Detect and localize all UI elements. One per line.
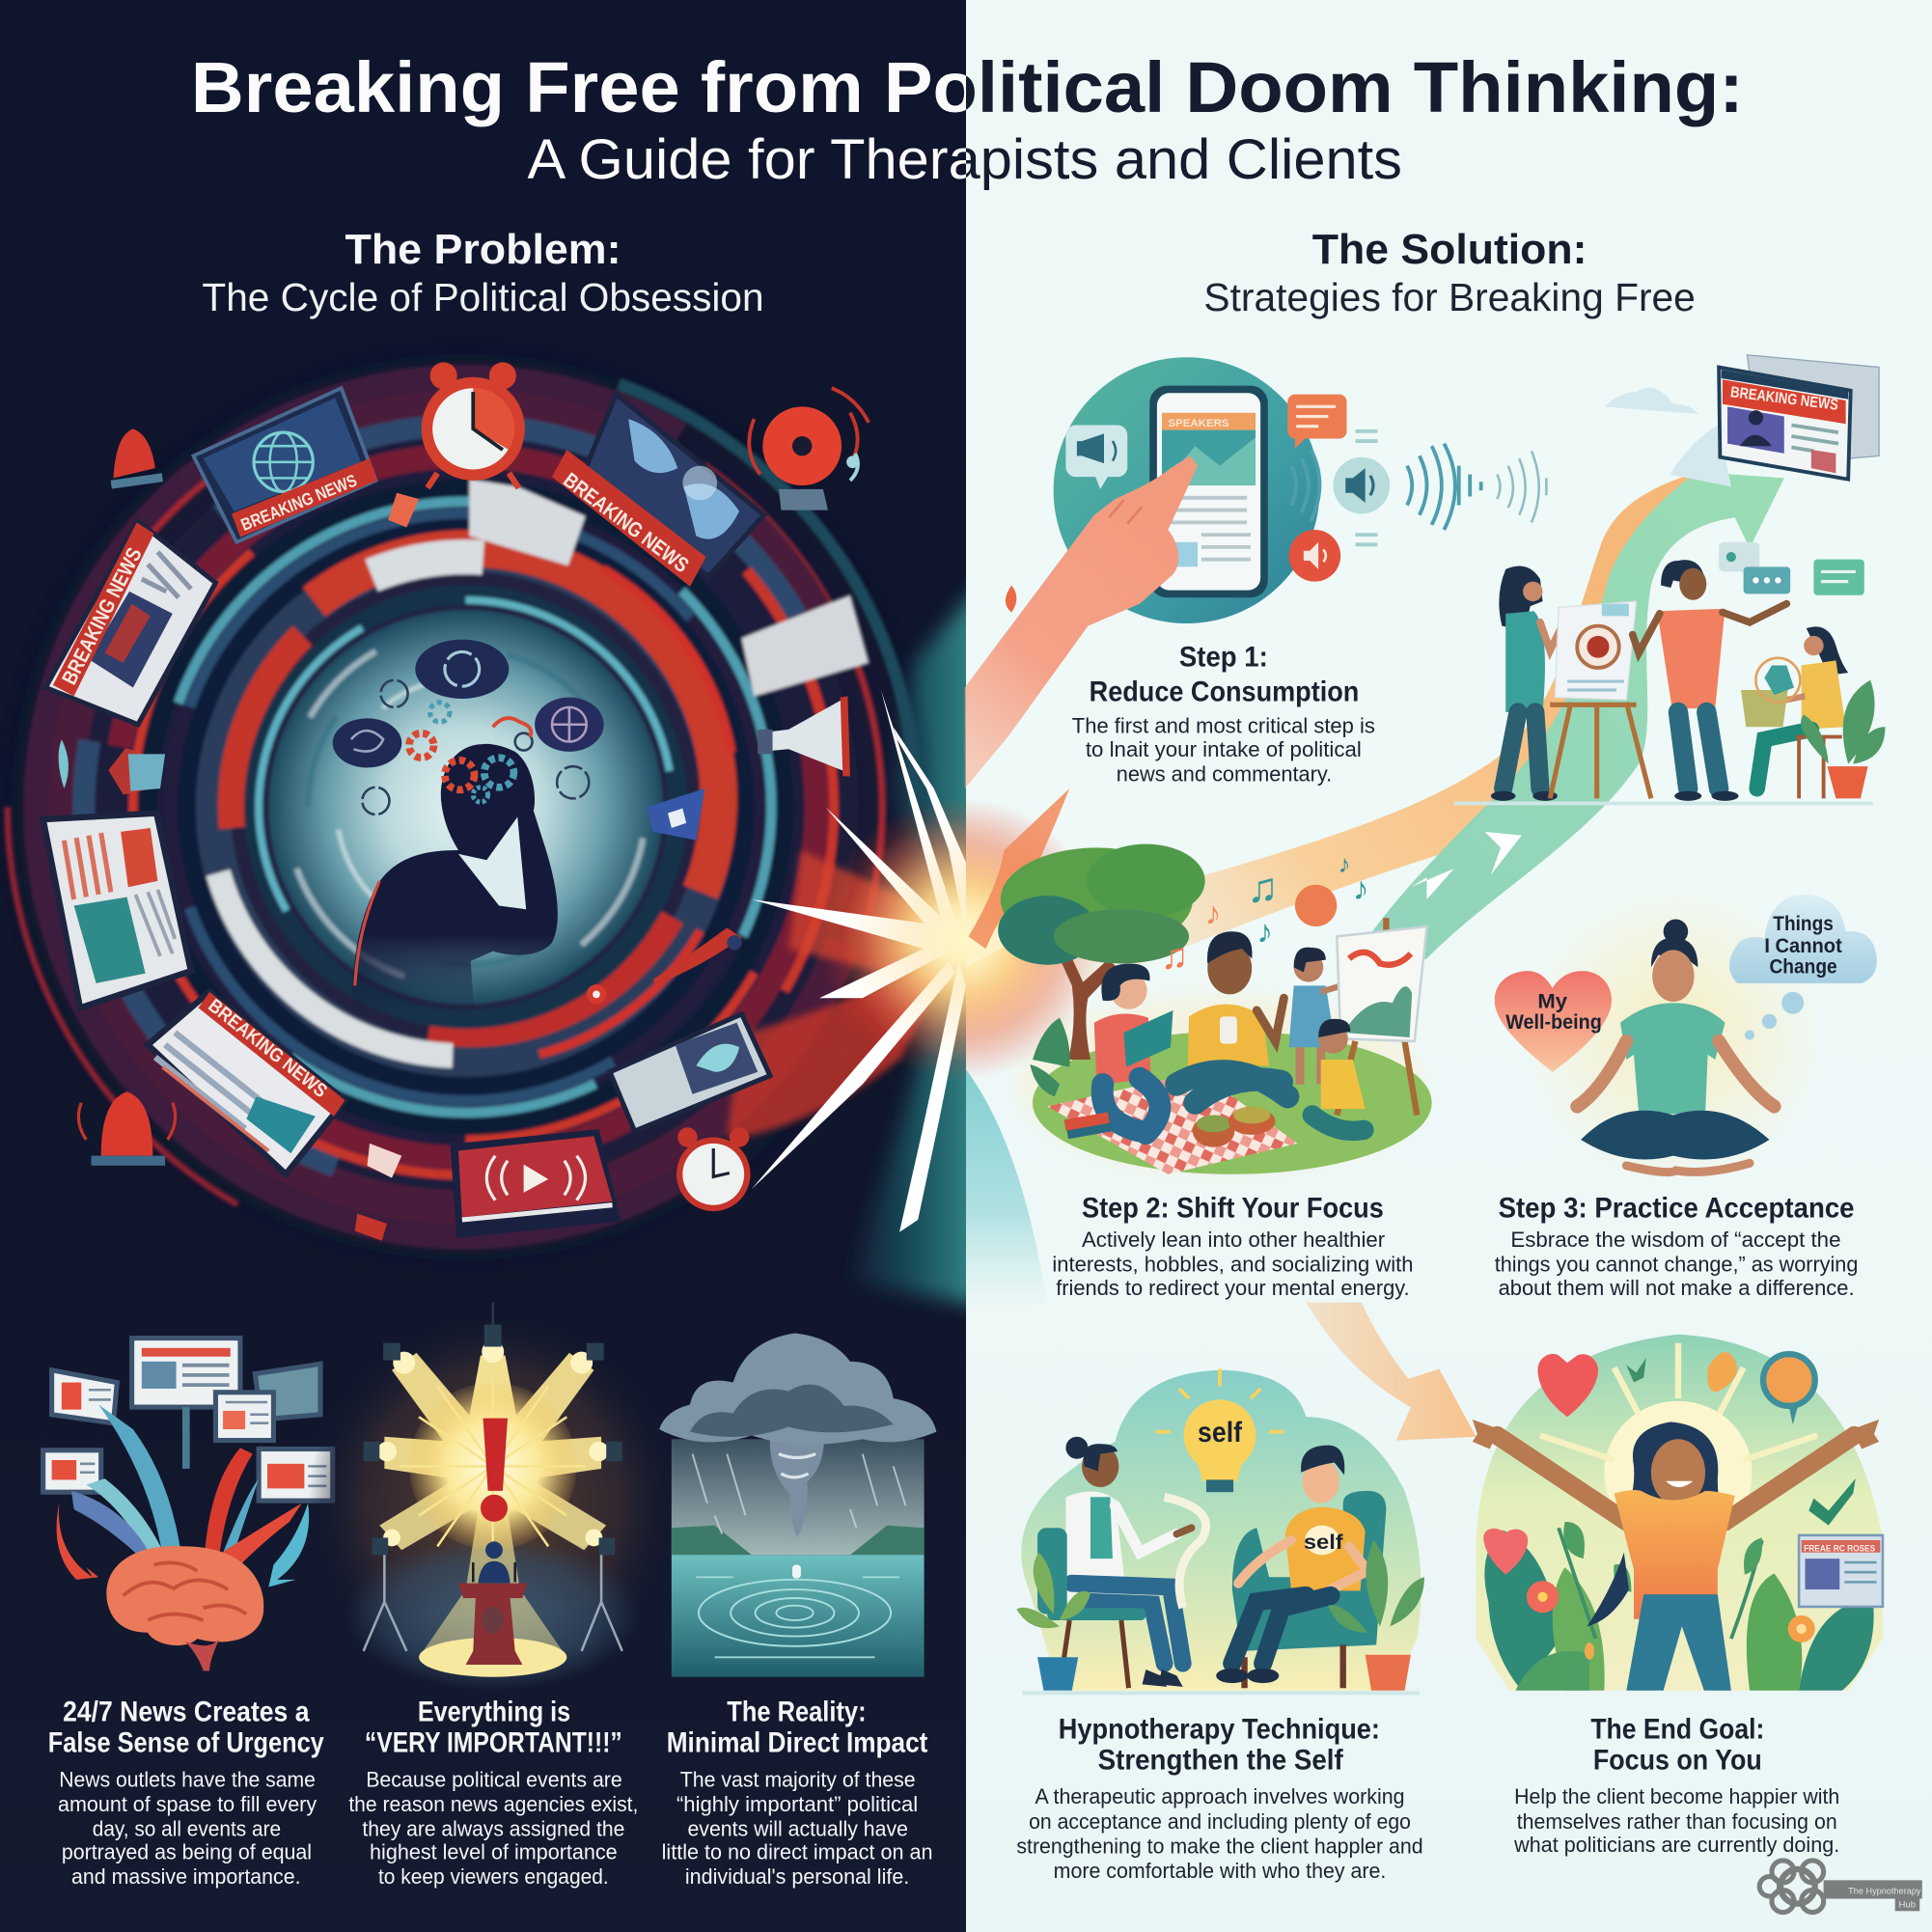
therapist chair bbox=[1037, 1528, 1067, 1615]
hypnotherapy text: Strengthen the Self bbox=[1098, 1744, 1343, 1776]
background: light right half bbox=[966, 0, 1932, 1932]
icon: world map screen breaking news bbox=[552, 395, 764, 587]
ripples bbox=[699, 1580, 891, 1646]
title: Breaking Free from Political Doom Thinking: bbox=[191, 47, 1744, 127]
light gap between arm and chest bbox=[458, 817, 526, 909]
step 3 text: Esbrace the wisdom of “accept the bbox=[1510, 1228, 1841, 1252]
illustration: step 3 meditation: I Cannot bbox=[1764, 935, 1842, 957]
icon: globe monitor breaking news: BREAKING NEWS bbox=[238, 471, 360, 535]
text: false sense of urgency: False Sense of Urgency bbox=[48, 1727, 324, 1759]
end goal text: Focus on You bbox=[1593, 1744, 1762, 1776]
illustration: end goal happy woman bbox=[1473, 1335, 1883, 1691]
image card lower right bbox=[610, 1014, 770, 1131]
illustration: step 3 meditation: Things bbox=[1773, 913, 1834, 935]
heading: the problem bbox=[202, 227, 764, 319]
music notes: ♪ bbox=[1205, 897, 1221, 932]
music notes bbox=[1161, 851, 1369, 978]
stands bbox=[364, 1555, 622, 1651]
step 2 text: Actively lean into other healthier bbox=[1082, 1228, 1386, 1252]
text: false sense of urgency: day, so all events are bbox=[93, 1816, 281, 1840]
illustration: hypnotherapy session bbox=[1016, 1369, 1424, 1693]
illustration: step 3 meditation bbox=[1495, 881, 1877, 1189]
text: very important: Because political events are bbox=[366, 1767, 622, 1791]
illustration: step 2 family picnic bbox=[998, 844, 1432, 1174]
blanket bbox=[1047, 1072, 1297, 1174]
gears in head bbox=[445, 758, 513, 802]
logo: hypnotherapy hub key: The Hypnotherapy bbox=[1848, 1886, 1921, 1896]
text: minimal direct impact: individual's personal life. bbox=[685, 1864, 909, 1889]
therapist bbox=[1065, 1437, 1088, 1459]
text: false sense of urgency: News outlets have the same bbox=[59, 1767, 316, 1791]
illustration: news overload brain bbox=[43, 1339, 333, 1670]
icon: alarm clock top bbox=[422, 362, 525, 488]
streams bbox=[98, 1405, 185, 1589]
plants bbox=[1016, 1553, 1090, 1628]
client bbox=[1303, 1459, 1339, 1504]
illustration: hypnotherapy session: self bbox=[1198, 1417, 1242, 1449]
step 2 text: friends to redirect your mental energy. bbox=[1056, 1276, 1410, 1300]
step 1 text: Step 1: bbox=[1179, 642, 1268, 674]
video player bbox=[453, 1131, 619, 1236]
text: very important: the reason news agencies exist, bbox=[348, 1792, 638, 1816]
woman standing bbox=[1499, 566, 1543, 631]
brain bbox=[106, 1546, 263, 1645]
exclamation bbox=[483, 1419, 508, 1491]
icon: megaphone bbox=[758, 696, 850, 776]
end goal text: Help the client become happier with bbox=[1514, 1784, 1839, 1808]
text: minimal direct impact: “highly important” political bbox=[676, 1792, 918, 1816]
hypnotherapy text: strengthening to make the client happler and bbox=[1016, 1834, 1423, 1858]
icon: breaking news browser window: BREAKING NEWS bbox=[1729, 384, 1839, 414]
icon: world map screen breaking news: BREAKING NEWS bbox=[559, 468, 694, 577]
speech bubbles and speaker waves bbox=[1065, 425, 1127, 489]
tree bbox=[1056, 945, 1118, 1060]
text: minimal direct impact: The Reality: bbox=[727, 1697, 867, 1728]
newspaper bottom breaking news bbox=[148, 992, 345, 1174]
end goal text: what politicians are currently doing. bbox=[1513, 1833, 1839, 1857]
heading: the problem: The Problem: bbox=[345, 227, 621, 273]
lights bbox=[482, 1340, 504, 1363]
icon: bell bottom left bbox=[78, 1091, 176, 1166]
illustration: spotlight exclamation over podium bbox=[308, 1303, 677, 1695]
step 3 text: about them will not make a difference. bbox=[1499, 1276, 1855, 1300]
music notes: ♪ bbox=[1339, 851, 1350, 878]
red wash behind right edge of vortex bbox=[727, 850, 955, 1140]
plant bbox=[1801, 680, 1885, 764]
hair bbox=[1616, 1421, 1730, 1531]
heading: the solution: The Solution: bbox=[1312, 227, 1587, 273]
heading: the solution bbox=[1203, 227, 1696, 319]
text: false sense of urgency: amount of spase to fill every bbox=[58, 1792, 317, 1816]
title: A Guide for Therapists and Clients bbox=[527, 128, 1402, 191]
step 2 text bbox=[1052, 1192, 1413, 1300]
music notes: ♪ bbox=[1256, 915, 1273, 951]
step 1 text: to lnait your intake of political bbox=[1086, 737, 1362, 761]
step 3 text: Step 3: Practice Acceptance bbox=[1499, 1192, 1855, 1224]
man bbox=[1207, 943, 1252, 994]
text: very important: to keep viewers engaged. bbox=[378, 1864, 609, 1889]
small debris icons bbox=[59, 493, 742, 1241]
music notes: ♫ bbox=[1161, 936, 1188, 978]
man bbox=[1661, 560, 1705, 588]
monitors bbox=[132, 1339, 240, 1407]
illustration: step 3 meditation: My bbox=[1537, 990, 1567, 1012]
step 2 text: Step 2: Shift Your Focus bbox=[1082, 1192, 1384, 1224]
icon: phone in teal circle with hand bbox=[965, 357, 1546, 788]
flowers bbox=[1527, 1581, 1559, 1613]
text: minimal direct impact: Minimal Direct Impact bbox=[667, 1727, 928, 1759]
paper card left lower bbox=[43, 814, 191, 1007]
icon: globe monitor breaking news bbox=[193, 388, 377, 542]
heading: the solution: Strategies for Breaking Free bbox=[1203, 275, 1696, 319]
boy bbox=[1318, 1024, 1348, 1054]
illustration: step 3 meditation: Change bbox=[1769, 956, 1837, 979]
arms bbox=[1497, 1435, 1855, 1522]
woman reading bbox=[1110, 972, 1147, 1009]
end goal text: themselves rather than focusing on bbox=[1517, 1809, 1837, 1834]
text: minimal direct impact: The vast majority of these bbox=[680, 1767, 916, 1791]
text: very important: “VERY IMPORTANT!!!” bbox=[365, 1727, 622, 1759]
text: minimal direct impact: events will actually have bbox=[687, 1816, 908, 1840]
text: false sense of urgency bbox=[48, 1697, 324, 1889]
illustration: group discussing media at easel bbox=[1454, 542, 1885, 803]
newspaper left breaking news bbox=[45, 521, 215, 725]
icon: breaking news browser window bbox=[1604, 355, 1879, 486]
text: false sense of urgency: and massive importance. bbox=[71, 1864, 301, 1889]
step 3 text: things you cannot change,” as worrying bbox=[1495, 1253, 1858, 1277]
child painting bbox=[1294, 952, 1323, 982]
music notes: ♫ bbox=[1247, 866, 1279, 912]
background: dark left half bbox=[0, 0, 966, 1932]
text: minimal direct impact bbox=[662, 1697, 933, 1889]
step 1 text: Reduce Consumption bbox=[1090, 676, 1359, 707]
text: minimal direct impact: little to no direct impact on an bbox=[662, 1840, 933, 1864]
text: very important bbox=[348, 1697, 638, 1889]
woman bbox=[1664, 919, 1688, 944]
ground bbox=[1454, 802, 1873, 805]
hypnotherapy text: A therapeutic approach invelves working bbox=[1035, 1784, 1405, 1808]
step 1 text bbox=[1072, 642, 1375, 786]
logo: hypnotherapy hub key: Hub bbox=[1899, 1899, 1916, 1910]
rain bbox=[693, 1454, 905, 1534]
leaves bbox=[1484, 1531, 1559, 1691]
seated woman bbox=[1807, 626, 1848, 676]
icon: bell top left bbox=[111, 428, 163, 489]
illustration: step 3 meditation: Well-being bbox=[1505, 1011, 1602, 1034]
text: very important: Everything is bbox=[418, 1697, 570, 1728]
hypnotherapy text bbox=[1016, 1714, 1423, 1883]
easel painting bbox=[1337, 918, 1417, 1115]
music notes: ♪ bbox=[1353, 871, 1369, 907]
text: very important: they are always assigned the bbox=[362, 1816, 624, 1840]
crack and light burst bbox=[752, 690, 1103, 1232]
heart bbox=[1495, 971, 1612, 1072]
bubbles bbox=[1719, 542, 1759, 571]
right-side reds and teal crack fragments bbox=[842, 585, 1090, 1306]
icon: bell top right bbox=[749, 388, 869, 511]
newspaper left breaking news: BREAKING NEWS bbox=[57, 543, 147, 688]
swirl bbox=[1165, 1497, 1206, 1608]
client chair bbox=[1232, 1491, 1386, 1651]
crack backdrop teal wedge on dark side bbox=[856, 583, 966, 1315]
illustration: hypnotherapy session: self bbox=[1304, 1530, 1344, 1554]
illustration: end goal happy woman: FREAE RC ROSES bbox=[1804, 1543, 1875, 1554]
hypnotherapy text: Hypnotherapy Technique: bbox=[1059, 1714, 1380, 1746]
illustration: storm over calm water bbox=[659, 1333, 936, 1677]
text: false sense of urgency: 24/7 News Creates a bbox=[63, 1697, 310, 1728]
hand bbox=[965, 455, 1198, 788]
thought clouds bbox=[415, 640, 509, 699]
silhouette bbox=[351, 744, 558, 1016]
food and books bbox=[1193, 1115, 1234, 1147]
shirt and pants bbox=[1615, 1490, 1735, 1619]
icon: phone in teal circle with hand: SPEAKERS bbox=[1168, 418, 1229, 429]
hypnotherapy text: more comfortable with who they are. bbox=[1054, 1859, 1386, 1883]
logo: hypnotherapy hub key bbox=[1759, 1861, 1922, 1913]
arrow: peach arrow to end goal bbox=[1306, 1303, 1477, 1441]
easel poster bbox=[1550, 703, 1651, 798]
swoosh spots bbox=[469, 480, 585, 566]
step 1 text: news and commentary. bbox=[1117, 761, 1332, 786]
spiral vortex of political news bbox=[0, 180, 1091, 1433]
text: false sense of urgency: portrayed as being of equal bbox=[62, 1840, 312, 1864]
heart icons, checkmark, news bbox=[1537, 1354, 1598, 1417]
cloud bbox=[659, 1333, 936, 1445]
newspaper bottom breaking news: BREAKING NEWS bbox=[204, 995, 331, 1102]
heading: the problem: The Cycle of Political Obsession bbox=[202, 275, 764, 319]
step 3 text bbox=[1495, 1192, 1858, 1300]
title bbox=[191, 47, 1744, 191]
speaker and podium bbox=[485, 1541, 503, 1559]
step 1 text: The first and most critical step is bbox=[1072, 714, 1375, 738]
step 2 text: interests, hobbles, and socializing with bbox=[1052, 1253, 1413, 1277]
end goal text: The End Goal: bbox=[1590, 1714, 1764, 1746]
arrow: path from news up to the right bbox=[1047, 472, 1784, 985]
text: very important: highest level of importance bbox=[370, 1840, 618, 1864]
bulb bbox=[1184, 1399, 1256, 1481]
hypnotherapy text: on acceptance and including plenty of ego bbox=[1029, 1809, 1411, 1834]
cloud bbox=[1729, 895, 1877, 983]
icon: small clock bbox=[676, 1127, 751, 1211]
tornado bbox=[770, 1432, 824, 1537]
center figure: person holding head with thought clouds bbox=[333, 640, 604, 1016]
end goal text bbox=[1513, 1714, 1839, 1857]
